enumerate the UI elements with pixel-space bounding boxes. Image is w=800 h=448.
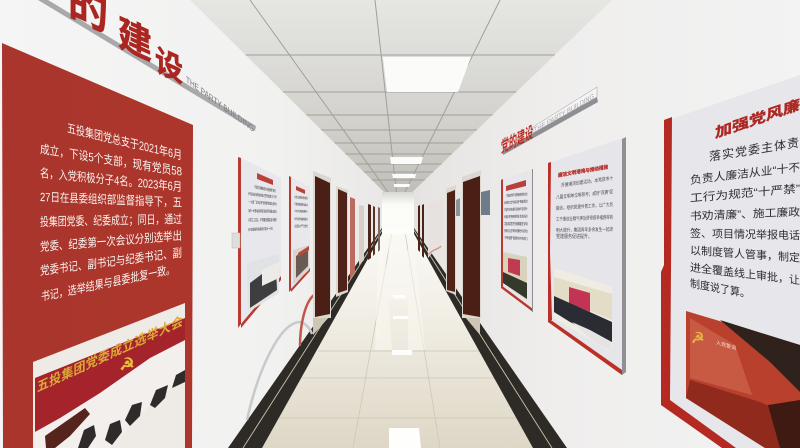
- board text: 签、项目情况举报电话: [690, 226, 800, 242]
- ceiling: [190, 0, 612, 206]
- board text: 负责人廉洁从业“十不: [690, 160, 800, 187]
- intro text: 党委书记、副书记与纪委书记、副: [40, 245, 182, 278]
- panel: left wall board 2: [238, 157, 281, 328]
- board text: 开展港湾创建活动，本常获市十: [561, 175, 613, 189]
- board text: 成立工会，开展团建活动等: [248, 217, 277, 222]
- board photo: [554, 268, 612, 353]
- intro text: 书记，选举结果与县委批复一致。: [41, 261, 175, 304]
- board text: 以制度管人管事，制定: [690, 243, 800, 265]
- floor streak reflections: [375, 232, 425, 350]
- right doors: [418, 170, 490, 335]
- sign heading: party building: 设: [155, 42, 183, 90]
- board text: 学习交流总结经验: [294, 216, 308, 221]
- light switch: [232, 233, 240, 248]
- board photo: [247, 254, 279, 312]
- board text: 书劝清廉”、施工廉政: [690, 205, 800, 223]
- board text: 工作人员积极参与: [294, 208, 308, 214]
- board text: 明大提升，集团青年多余发生一起进: [556, 226, 613, 234]
- board photo: ☭: [691, 330, 704, 347]
- board text: 推动工作取得更大实效: [504, 228, 528, 233]
- left wall sign: [38, 0, 256, 135]
- intro text: 投集团党委、纪委成立；同日，通过: [40, 211, 182, 229]
- right wall: [398, 0, 800, 448]
- panel: right board B: [548, 137, 626, 375]
- sign heading: 党的建设: [501, 123, 533, 157]
- photo: election meeting: 五投集团党委成立选举大会: [37, 312, 183, 395]
- intro text: [40, 120, 182, 304]
- board text: [248, 184, 277, 232]
- intro text: 五投集团党总支于2021年6月: [67, 120, 182, 163]
- right wall sign: [501, 87, 598, 157]
- wall arcs: [247, 295, 314, 420]
- board text: 组织开展专题讨论培训: [504, 214, 528, 219]
- board text: 开展主题党日活动: [294, 201, 308, 207]
- intro text: 名，入党积极分子4名。2023年6月: [40, 165, 182, 194]
- board text: 融合，组织党建共青工作，让广大员: [556, 201, 613, 212]
- photo: election meeting: ☭: [119, 355, 135, 374]
- floor light reflections: [389, 295, 421, 448]
- board text: 工行为规范“十严禁”: [690, 181, 800, 205]
- board text: 结合工作实际开展活动: [504, 199, 528, 205]
- board photo: 入党誓词: [716, 339, 736, 352]
- board text: [504, 191, 528, 241]
- left wall: [0, 0, 398, 448]
- board text: 不断提升服务水平能力: [504, 235, 528, 241]
- intro text: 成立，下设5个支部，现有党员58: [40, 141, 182, 179]
- sign english subtitle: THE PARTY BUILDING: [534, 92, 594, 135]
- sign english subtitle: THE PARTY BUILDING: [186, 75, 254, 135]
- board text: 工干事创业精气神及获得感幸福感得到: [556, 214, 613, 223]
- corridor end window: [382, 192, 414, 234]
- left doors: [313, 171, 380, 335]
- board text: 全面从严治党: [294, 223, 308, 228]
- baseboard right: [398, 205, 567, 448]
- panel: right board C: [661, 75, 800, 448]
- board text: 党建服务促进提升。: [556, 233, 592, 240]
- board text: 积极服务基层项目一线: [248, 226, 273, 232]
- photo: election meeting: [33, 303, 185, 448]
- board heading: 加强党风廉: [715, 96, 800, 142]
- intro text: 27日在县委组织部监督指导下，五: [40, 189, 182, 210]
- board text: 党汇投集团党委: [294, 194, 308, 200]
- floor: [262, 205, 535, 448]
- board text: 党员干部积极学习提升: [504, 206, 528, 212]
- panel: left wall board 3: [289, 176, 310, 292]
- panel: red intro board: [2, 43, 193, 448]
- board text: “两强双融”推进党建工作: [248, 191, 277, 200]
- board text: 党史学习教育常态化: [506, 191, 528, 198]
- board photo: [503, 252, 527, 300]
- board text: [690, 135, 800, 301]
- board text: 一线“门诊部”开展党建活动: [248, 199, 277, 206]
- board text: 发挥党员先锋模范作用: [504, 221, 528, 226]
- ceiling light panels: [383, 57, 471, 187]
- board text: 落实党委主体责: [709, 135, 800, 164]
- board text: 八届文明单位等称号；成好“双拥”促: [556, 188, 613, 201]
- board text: 进全覆盖线上审批，让: [690, 260, 800, 287]
- baseboard left: [228, 205, 398, 448]
- intro text: 党委、纪委第一次会议分别选举出: [40, 228, 182, 254]
- board text: 党汇投集团以党建引领: [254, 184, 276, 193]
- board photo: [686, 311, 800, 448]
- board heading: 廉洁文明港湾与推动措施: [558, 164, 608, 179]
- sign heading: party building: 建: [118, 11, 152, 68]
- board text: [556, 175, 613, 240]
- board text: 制度说了算。: [690, 276, 750, 301]
- board photo: [293, 245, 309, 285]
- board text: 第一线“党建项目部”开展活动: [248, 208, 277, 214]
- board text: [294, 194, 308, 228]
- panel: right board A: [501, 169, 533, 312]
- sign heading: party building: [68, 0, 183, 90]
